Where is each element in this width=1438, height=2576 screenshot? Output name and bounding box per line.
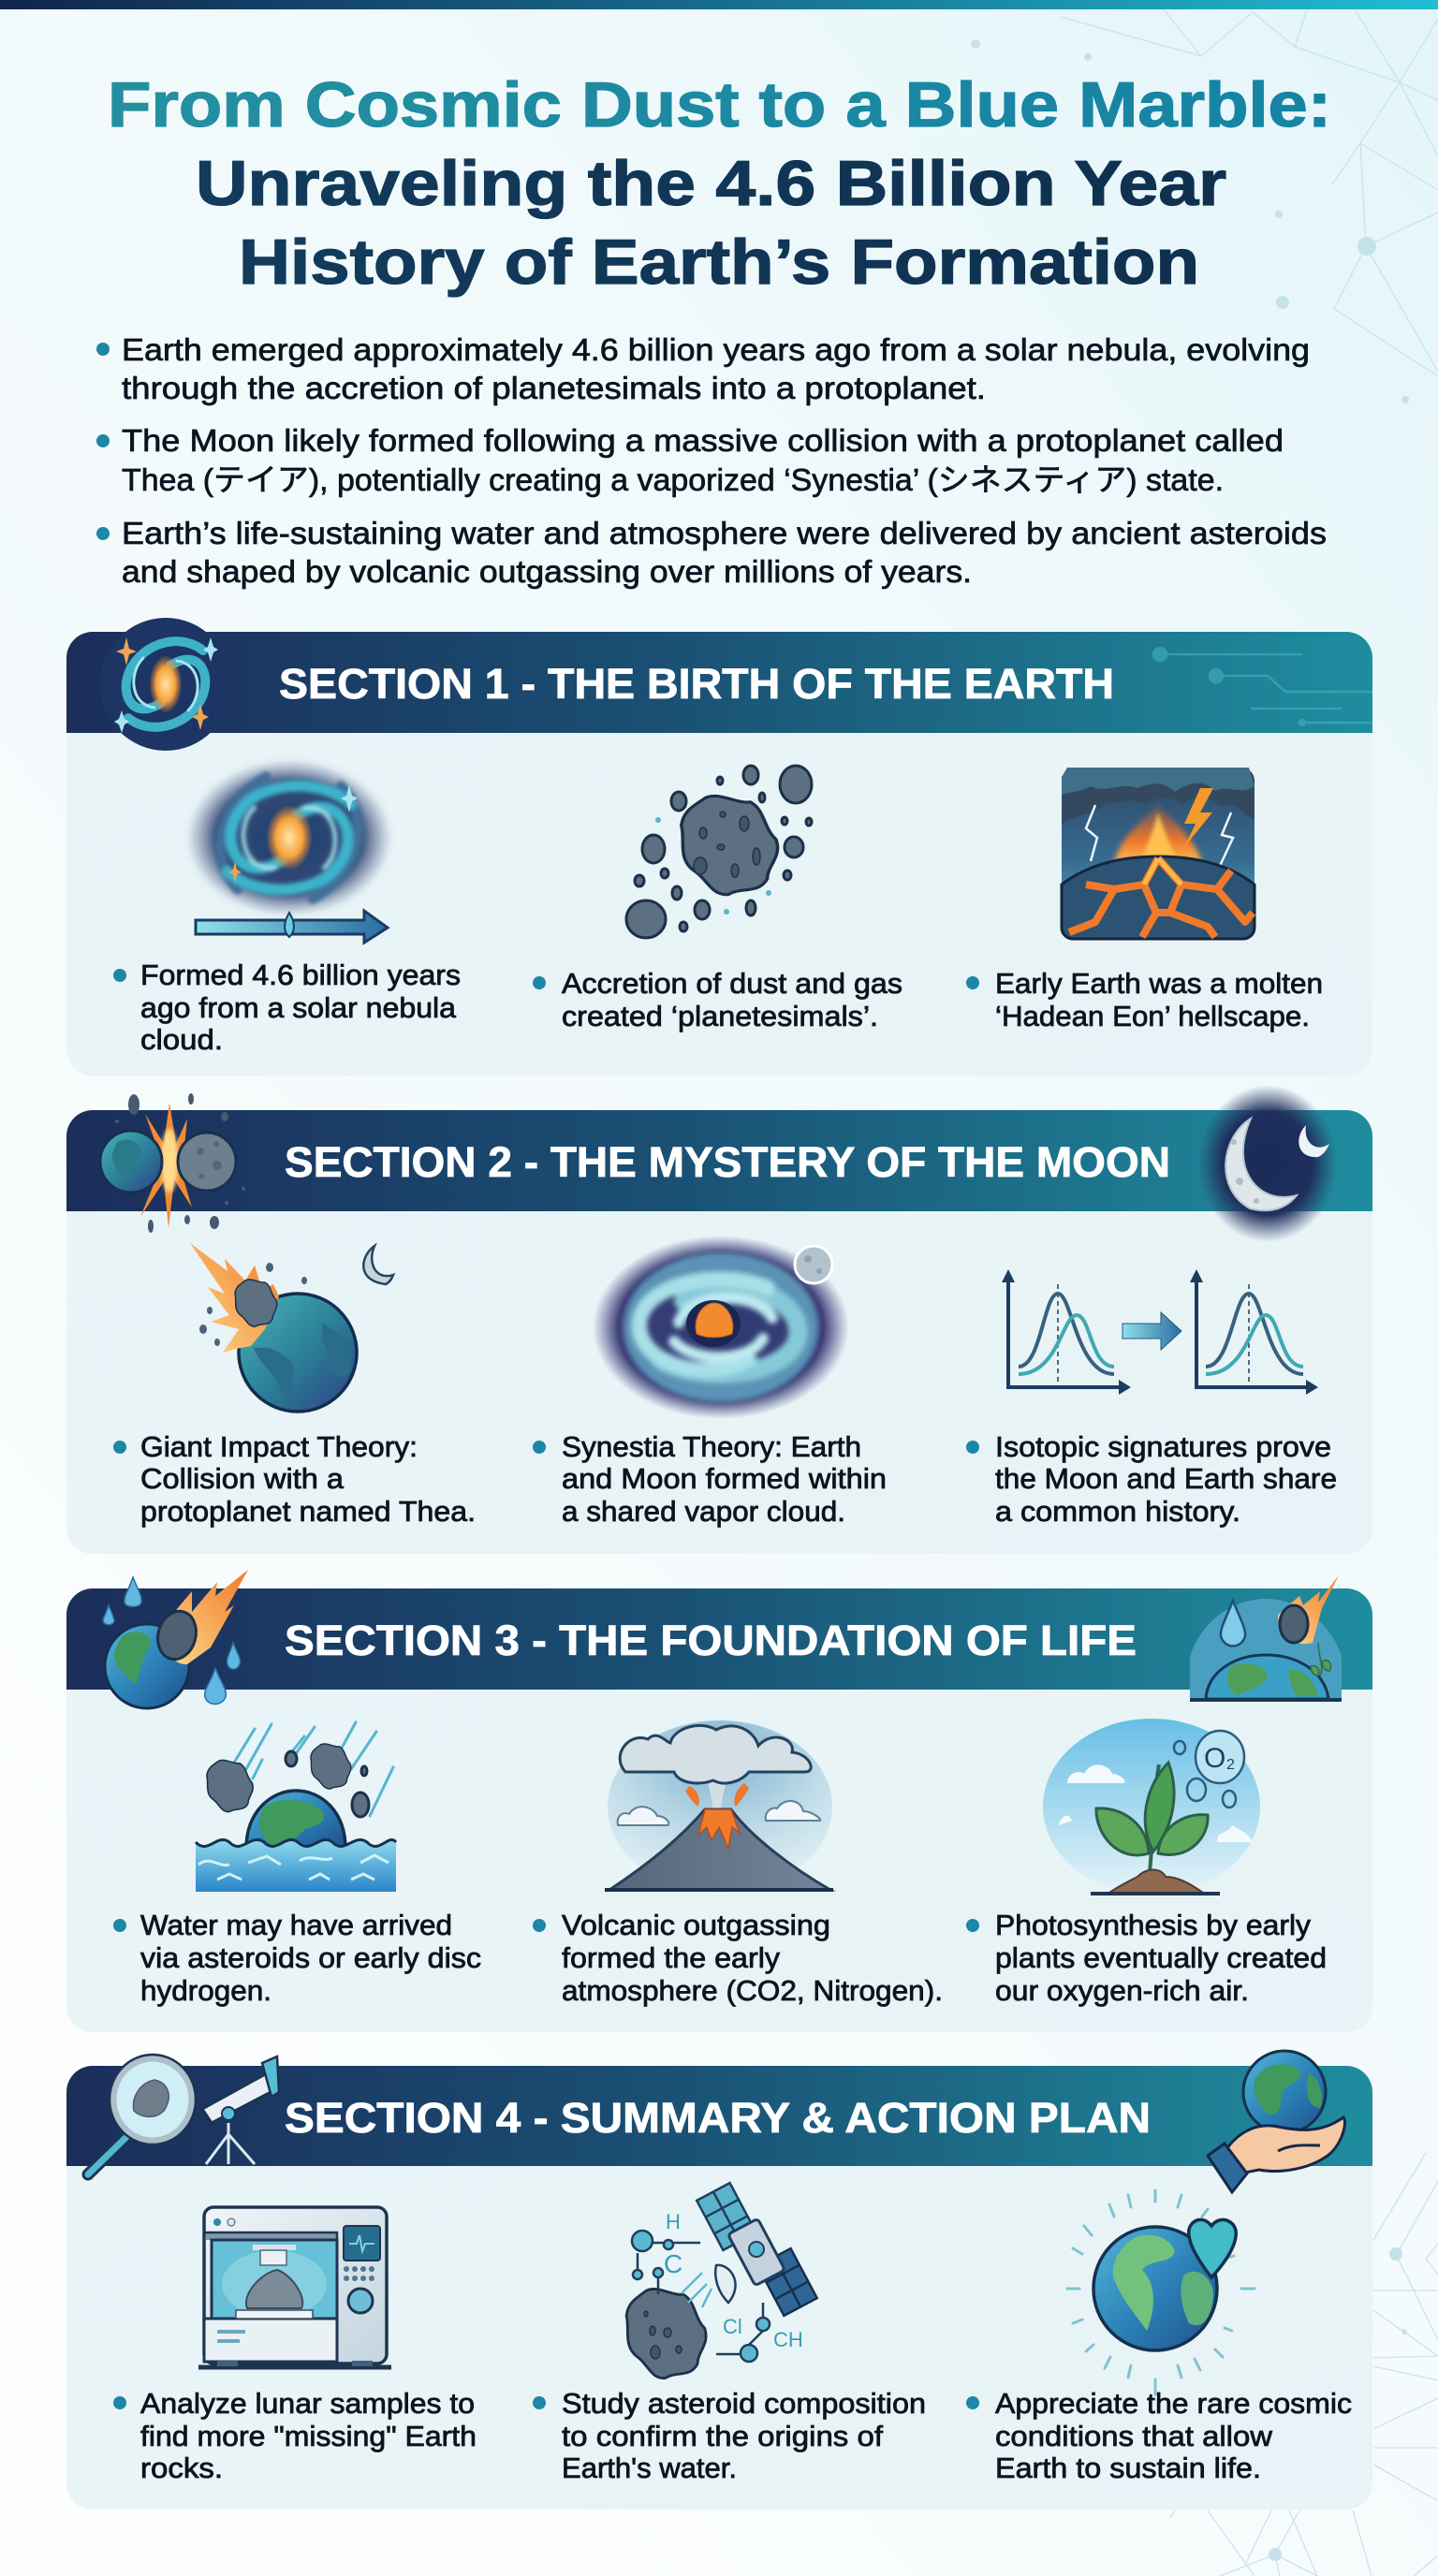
text: section 1 column 1: Formed 4.6 billion years [140,959,461,991]
text: section 4 column 2: Earth's water. [562,2452,737,2484]
text: section 4 column 3: Appreciate the rare cosmic [995,2387,1352,2420]
icon: plant producing oxygen: 2 [1226,1757,1235,1773]
title: From Cosmic Dust to a Blue Marble: [108,69,1331,140]
text: section 3 column 2: Volcanic outgassing [562,1909,830,1941]
text: section 4 column 1: find more "missing" Earth [140,2420,477,2452]
icon: plant producing oxygen [1043,1719,1260,1895]
text: section 1 column 2: created ‘planetesimals’. [562,1000,878,1032]
text: section 4 column 3: Earth to sustain life. [995,2452,1261,2484]
section 3 heading: SECTION 3 - THE FOUNDATION OF LIFE [285,1617,1137,1664]
text: section 3 column 1: hydrogen. [140,1974,271,2007]
panel: section 1 [66,618,1372,1076]
icon: asteroids over ocean [196,1722,396,1892]
text: section 4 column 1: rocks. [140,2452,223,2484]
text: section 3 column 1: Water may have arrived [140,1909,452,1941]
text: section 3 column 2: atmosphere (CO2, Nitrogen). [562,1974,943,2007]
text: section 3 column 3: our oxygen-rich air. [995,1974,1249,2007]
title: Unraveling the 4.6 Billion Year [196,148,1226,219]
text: section 4 column 2: to confirm the origins of [562,2420,883,2452]
intro bullet list: The Moon likely formed following a massive collision with a protoplanet called [122,423,1284,458]
text: section 2 column 1: Collision with a [140,1462,345,1495]
text: section 4 column 1 [113,2387,477,2484]
text: section 1 column 3: ‘Hadean Eon’ hellscape. [995,1000,1310,1032]
icon: spiral galaxy with time arrow [186,759,392,943]
icon: droplet, meteor and plant on Earth [1190,1575,1342,1700]
text: section 1 column 2 [533,967,902,1032]
text: section 3 column 1 [113,1909,481,2007]
text: section 4 column 1: Analyze lunar samples to [140,2387,475,2420]
title [108,69,1331,298]
title: History of Earth’s Formation [239,227,1199,298]
icon: galaxy badge [100,618,231,751]
icon: planets colliding [100,1093,245,1233]
text: section 2 column 2: Synestia Theory: Earth [562,1430,861,1463]
icon: synestia vapor cloud [593,1236,849,1419]
text: section 2 column 1 [113,1430,476,1528]
text: section 2 column 2: and Moon formed within [562,1462,887,1495]
text: section 2 column 3: the Moon and Earth share [995,1462,1337,1495]
intro bullet list: and shaped by volcanic outgassing over millions of years. [122,554,972,589]
icon: giant impact on Earth [190,1243,393,1412]
icon: hand holding Earth [1208,2051,1344,2192]
icon: Hadean molten Earth [1062,768,1255,939]
chart: isotopic signature distributions [1002,1269,1318,1395]
intro bullet list [96,332,1327,589]
intro bullet list: Earth emerged approximately 4.6 billion years ago from a solar nebula, evolving [122,332,1310,367]
icon: satellite, asteroid and molecules: H [666,2210,681,2233]
text: section 3 column 1: via asteroids or early disc [140,1941,481,1974]
intro bullet list: Earth’s life-sustaining water and atmosphere were delivered by ancient asteroids [122,516,1327,550]
text: section 4 column 2 [533,2387,926,2484]
icon: magnifier and telescope [88,2055,279,2174]
text: section 3 column 3: plants eventually created [995,1941,1327,1974]
intro bullet list: through the accretion of planetesimals into a protoplanet. [122,371,986,405]
text: section 2 column 3 [966,1430,1337,1528]
panel: section 3 [66,1570,1372,2032]
text: section 2 column 1: protoplanet named Thea. [140,1495,476,1528]
text: section 1 column 1: cloud. [140,1023,223,1056]
text: section 1 column 2: Accretion of dust and gas [562,967,902,1000]
text: section 3 column 2: formed the early [562,1941,781,1974]
panel: section 2 [66,1085,1372,1554]
icon: sample analysis machine [198,2207,391,2367]
section 1 heading: SECTION 1 - THE BIRTH OF THE EARTH [279,660,1114,708]
icon: satellite, asteroid and molecules [626,2183,817,2378]
intro bullet list: Thea (テイア), potentially creating a vaporized ‘Synestia’ (シネスティア) state. [122,462,1224,497]
time arrow [196,911,388,943]
text: section 3 column 3 [966,1909,1327,2007]
text: section 2 column 2: a shared vapor cloud. [562,1495,845,1528]
icon: satellite, asteroid and molecules: CH [773,2328,803,2351]
icon: crescent moons [1198,1085,1337,1242]
text: section 4 column 2: Study asteroid composition [562,2387,926,2420]
icon: plant producing oxygen: O [1204,1743,1225,1774]
panel: section 4 [66,2051,1372,2510]
text: section 3 column 2 [533,1909,943,2007]
icon: planetesimals accretion [626,766,812,938]
text: section 1 column 3 [966,967,1323,1032]
text: section 2 column 2 [533,1430,887,1528]
icon: satellite, asteroid and molecules: Cl [723,2315,742,2338]
icon: volcano outgassing [605,1720,833,1893]
icon: satellite, asteroid and molecules: C [664,2249,682,2278]
text: section 1 column 1 [113,959,461,1056]
text: section 3 column 3: Photosynthesis by early [995,1909,1311,1941]
text: section 2 column 3: a common history. [995,1495,1240,1528]
text: section 1 column 1: ago from a solar nebula [140,991,457,1024]
text: section 4 column 3 [966,2387,1352,2484]
text: section 2 column 3: Isotopic signatures prove [995,1430,1331,1463]
icon: earth, meteor and droplets [103,1570,248,1708]
text: section 2 column 1: Giant Impact Theory: [140,1430,418,1463]
icon: Earth with heart [1067,2190,1255,2394]
text: section 4 column 3: conditions that allow [995,2420,1273,2452]
section 2 heading: SECTION 2 - THE MYSTERY OF THE MOON [285,1138,1170,1186]
text: section 1 column 3: Early Earth was a molten [995,967,1323,1000]
section 4 heading: SECTION 4 - SUMMARY & ACTION PLAN [285,2094,1151,2142]
